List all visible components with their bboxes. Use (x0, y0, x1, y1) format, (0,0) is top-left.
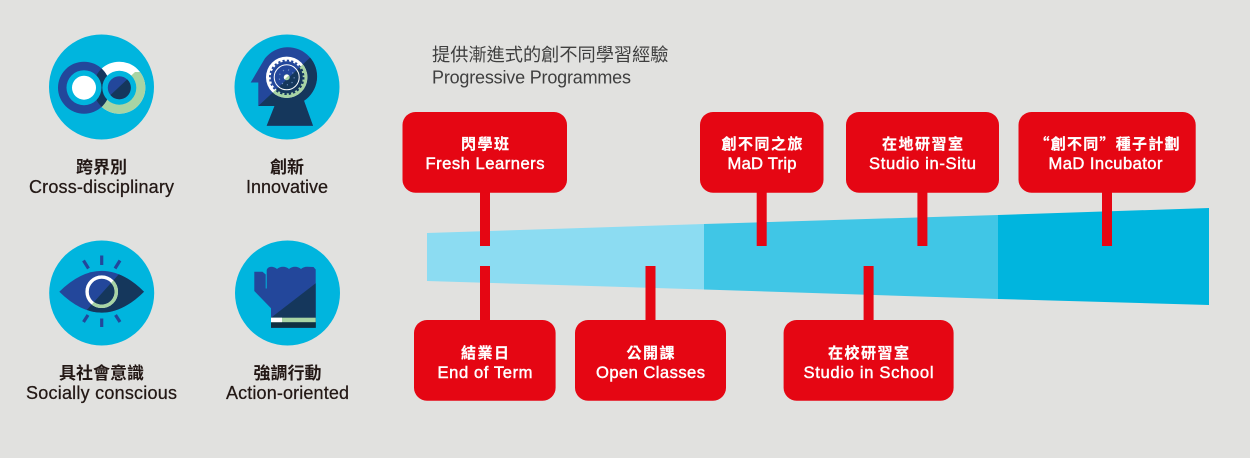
panel: action-oriented (226, 240, 349, 403)
label: cross-disciplinary: Cross-disciplinary (29, 177, 174, 197)
band stage 3 (998, 208, 1209, 305)
callout: Studio in School (784, 266, 954, 401)
panel: socially conscious (26, 240, 177, 403)
callout: Studio in-Situ (846, 112, 999, 246)
label: innovative: 創新 (270, 157, 304, 177)
callout: End of Term: 結業日 (461, 344, 509, 362)
panel: innovative (234, 34, 340, 197)
heading: 提供漸進式的創不同學習經驗 (432, 45, 668, 65)
heading (432, 45, 668, 88)
chart: progressive band (427, 208, 1209, 305)
callout: MaD Incubator (1018, 112, 1196, 246)
label: socially conscious: 具社會意識 (59, 363, 144, 383)
callout: MaD Trip: 創不同之旅 (722, 135, 802, 153)
label: action-oriented: Action-oriented (226, 383, 349, 403)
label: socially conscious (26, 363, 177, 403)
callout: Studio in-Situ: Studio in-Situ (869, 154, 976, 173)
callout: MaD Trip (700, 112, 824, 246)
panel: cross-disciplinary (29, 34, 174, 197)
callout: Fresh Learners: Fresh Learners (426, 154, 544, 173)
callout: Open Classes: Open Classes (596, 363, 705, 382)
label: cross-disciplinary (29, 158, 174, 197)
label: socially conscious: Socially conscious (26, 383, 177, 403)
band stage 1 (427, 224, 704, 290)
icon: eye (49, 240, 154, 346)
band stage 2 (704, 215, 998, 299)
callout: Open Classes: 公開課 (626, 344, 674, 362)
callout: End of Term (414, 266, 556, 401)
callout: End of Term: End of Term (438, 363, 532, 382)
label: action-oriented: 強調行動 (254, 364, 322, 383)
icon: head with gear (234, 34, 340, 140)
label: innovative (246, 157, 328, 197)
callout: Fresh Learners (402, 112, 567, 246)
icon: interlocking rings (49, 34, 154, 140)
label: innovative: Innovative (246, 177, 328, 197)
callout: Studio in-Situ: 在地研習室 (882, 135, 963, 153)
callout: Studio in School: 在校研習室 (828, 344, 909, 362)
label: cross-disciplinary: 跨界別 (76, 158, 127, 177)
heading: Progressive Programmes (432, 68, 631, 88)
callout: Open Classes (575, 266, 726, 401)
callout: MaD Incubator: “創不同”種子計劃 (1034, 133, 1180, 154)
label: action-oriented (226, 364, 349, 403)
callout: MaD Incubator: MaD Incubator (1048, 154, 1163, 173)
callout: MaD Trip: MaD Trip (728, 154, 796, 173)
icon: raised fist glove (235, 240, 340, 346)
callout: Fresh Learners: 閃學班 (461, 135, 509, 153)
callout: Studio in School: Studio in School (804, 363, 934, 382)
